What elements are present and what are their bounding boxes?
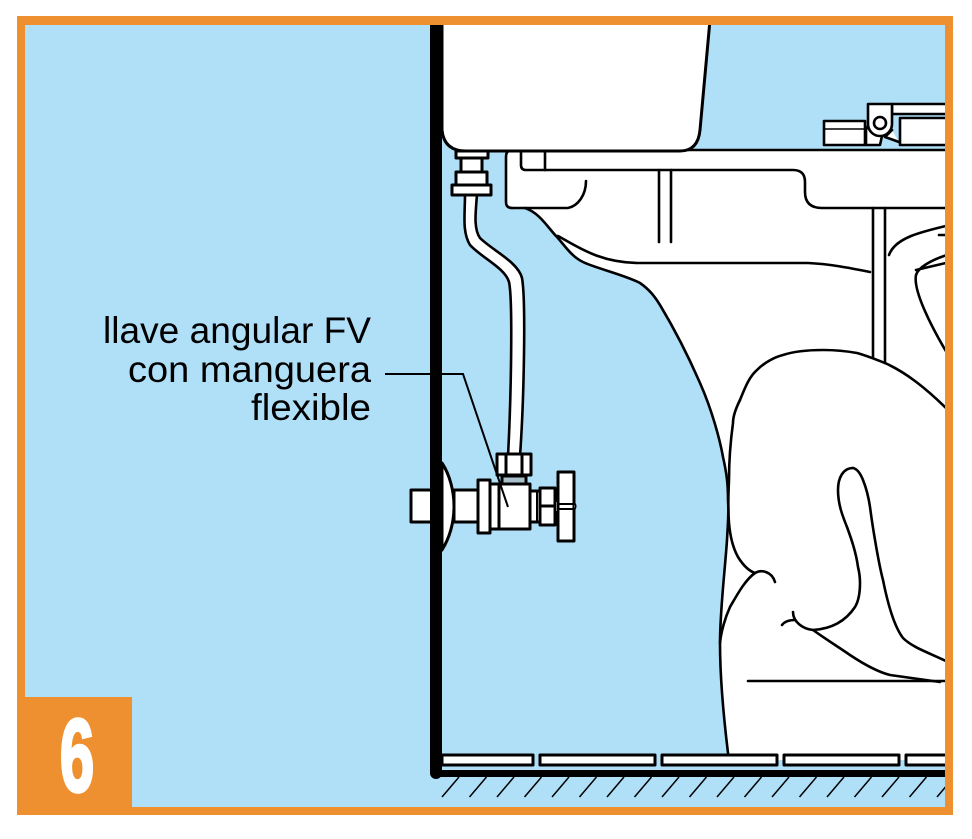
step number badge [17,697,132,815]
wall [430,500,442,779]
hose [464,194,524,456]
tank [442,20,710,151]
callout label [103,310,371,428]
leader line [385,374,508,507]
floor line [436,770,956,777]
callout label: llave angular FV [103,310,371,351]
number 6: 6 [60,698,94,813]
floor hatching [442,777,954,797]
angle valve [411,454,576,550]
toilet bowl body [506,150,960,760]
seat hinge and lid [824,104,950,145]
callout label: flexible [251,387,371,428]
toilet illustration [411,10,966,797]
tank connector [452,151,491,195]
toilet trapway curves [720,350,950,682]
floor tiles [442,755,966,765]
callout label: con manguera [128,349,371,390]
